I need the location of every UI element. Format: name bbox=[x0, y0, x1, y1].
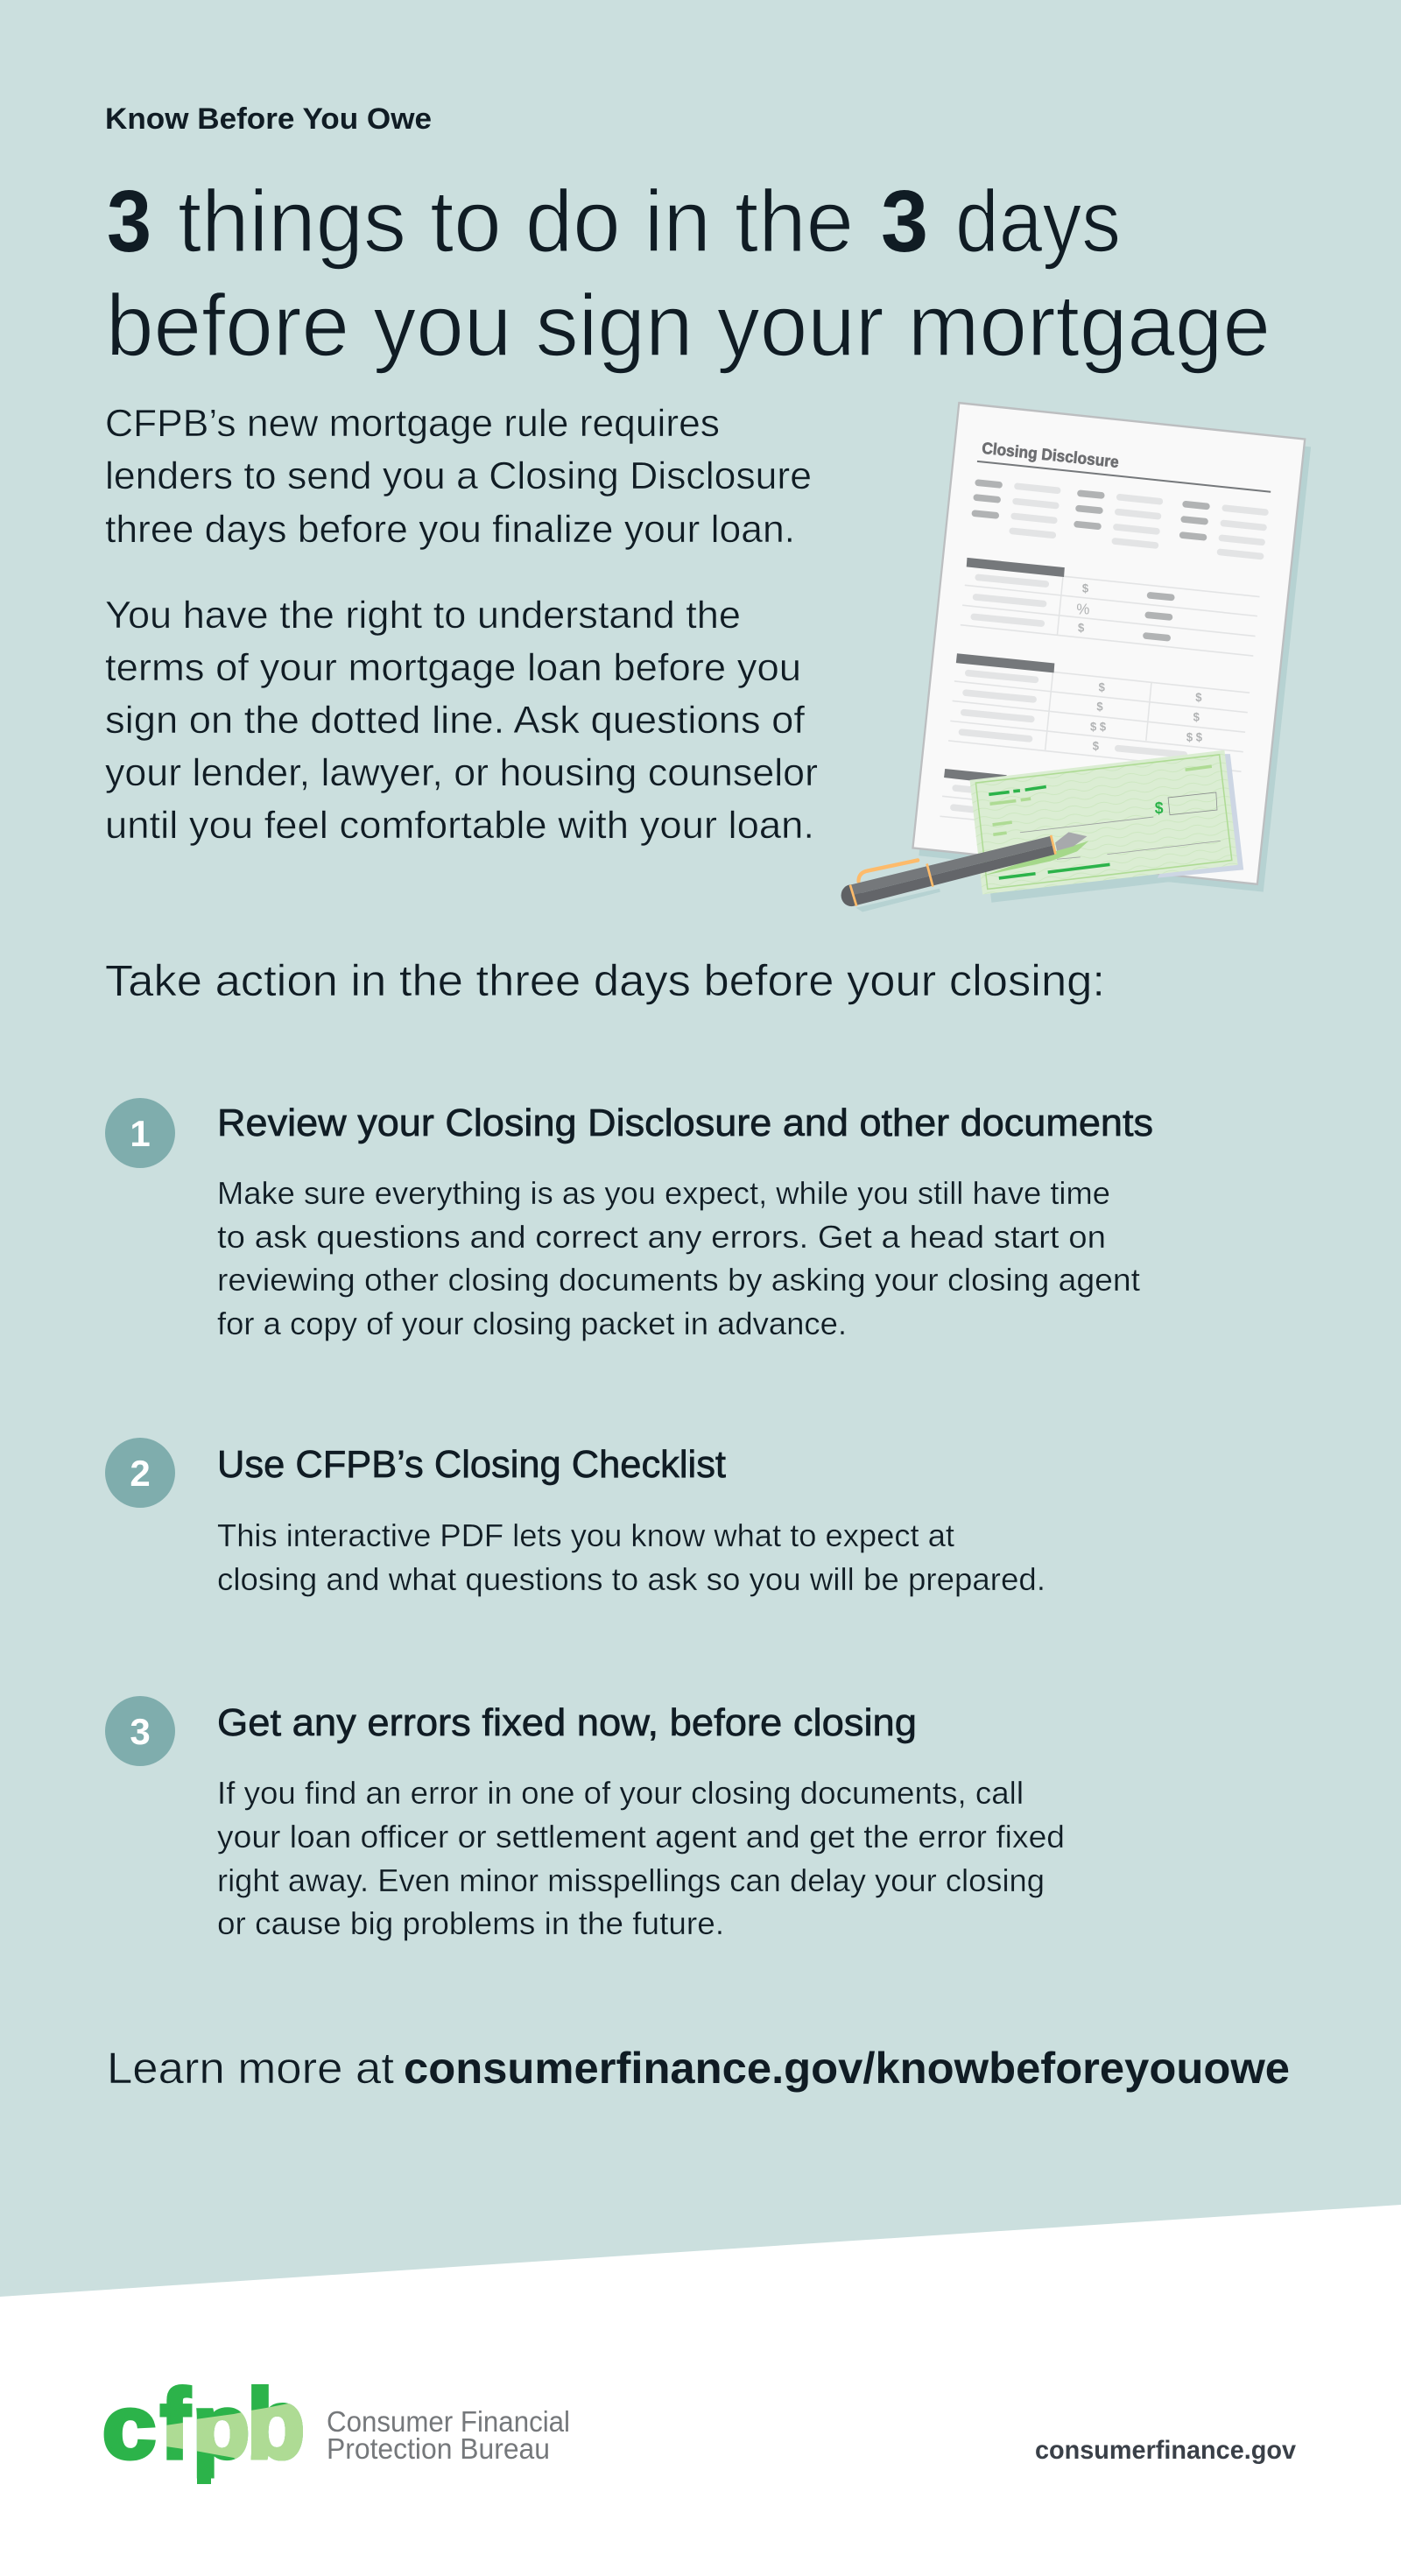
cfpb logo: b bbox=[247, 2369, 305, 2479]
title: 3 bbox=[107, 172, 151, 271]
badge 2 bbox=[105, 1438, 175, 1508]
document page: $ bbox=[1093, 739, 1100, 753]
rights paragraph: You have the right to understand the bbox=[105, 594, 741, 637]
step 2 heading: Use CFPB’s Closing Checklist bbox=[217, 1443, 726, 1486]
website: consumerfinance.gov bbox=[1035, 2436, 1296, 2465]
step 1 body: for a copy of your closing packet in advance. bbox=[217, 1306, 847, 1341]
check bbox=[970, 750, 1243, 894]
logo wordmark: Consumer Financial bbox=[327, 2405, 570, 2438]
illustration: closing disclosure, check and pen bbox=[841, 403, 1311, 912]
title: 3 bbox=[881, 172, 928, 271]
document page: $ $ bbox=[1090, 720, 1107, 734]
rights paragraph bbox=[105, 594, 818, 847]
learn more link: consumerfinance.gov/knowbeforeyouowe bbox=[404, 2044, 1290, 2093]
pen bbox=[841, 832, 1088, 912]
learn more link: Learn more at bbox=[107, 2044, 394, 2093]
document page: % bbox=[1076, 600, 1089, 618]
cfpb logo bbox=[102, 2369, 570, 2484]
intro paragraph: three days before you finalize your loan. bbox=[105, 508, 795, 551]
intro paragraph: CFPB’s new mortgage rule requires bbox=[105, 402, 720, 445]
logo wordmark bbox=[327, 2405, 570, 2465]
step 3 body: your loan officer or settlement agent and get the error fixed bbox=[217, 1819, 1065, 1855]
intro paragraph: lenders to send you a Closing Disclosure bbox=[105, 454, 812, 497]
logo wordmark: Protection Bureau bbox=[327, 2432, 550, 2465]
cfpb logo: c bbox=[102, 2377, 156, 2477]
document page: Closing Disclosure bbox=[982, 439, 1120, 471]
title: before you sign your mortgage bbox=[106, 277, 1271, 375]
step 1 heading: Review your Closing Disclosure and other documents bbox=[217, 1101, 1153, 1144]
step 1 body: to ask questions and correct any errors. Get a head start on bbox=[217, 1219, 1106, 1255]
step 1 body: Make sure everything is as you expect, while you still have time bbox=[217, 1175, 1110, 1211]
document page: $ bbox=[1096, 700, 1103, 714]
step 2 body bbox=[217, 1517, 1045, 1597]
title: days bbox=[955, 172, 1121, 271]
eyebrow: Know Before You Owe bbox=[105, 102, 432, 136]
document page bbox=[912, 403, 1305, 884]
document page: $ bbox=[1195, 691, 1202, 704]
title: things to do in the bbox=[178, 172, 854, 271]
rights paragraph: sign on the dotted line. Ask questions of bbox=[105, 699, 806, 742]
rights paragraph: terms of your mortgage loan before you bbox=[105, 646, 801, 689]
intro paragraph bbox=[105, 402, 812, 551]
step 1 body bbox=[217, 1175, 1140, 1341]
step 3 body: If you find an error in one of your closing documents, call bbox=[217, 1775, 1024, 1811]
badge 3: 3 bbox=[130, 1711, 151, 1752]
cfpb logo: f bbox=[160, 2369, 191, 2479]
check shadow bbox=[978, 758, 1246, 903]
document page: $ bbox=[1078, 621, 1085, 635]
document shadow bbox=[919, 411, 1311, 892]
document page: $ bbox=[1082, 581, 1089, 595]
step 2 body: closing and what questions to ask so you will be prepared. bbox=[217, 1561, 1045, 1597]
badge 1 bbox=[105, 1098, 175, 1168]
step 2 bbox=[105, 1438, 1045, 1597]
rights paragraph: your lender, lawyer, or housing counselor bbox=[105, 751, 818, 794]
step 2 body: This interactive PDF lets you know what to expect at bbox=[217, 1517, 954, 1553]
badge 3 bbox=[105, 1696, 175, 1766]
step 3 heading: Get any errors fixed now, before closing bbox=[217, 1701, 917, 1744]
badge 2: 2 bbox=[130, 1453, 151, 1494]
title bbox=[106, 172, 1271, 375]
badge 1: 1 bbox=[130, 1113, 151, 1154]
check: $ bbox=[1155, 799, 1164, 817]
step 3 body: right away. Even minor misspellings can delay your closing bbox=[217, 1862, 1045, 1898]
cfpb logo: p bbox=[193, 2377, 250, 2477]
document page: $ bbox=[1193, 710, 1200, 723]
step 1 body: reviewing other closing documents by asking your closing agent bbox=[217, 1262, 1140, 1298]
step 3 body bbox=[217, 1775, 1065, 1941]
document page: $ bbox=[1099, 680, 1105, 694]
action heading: Take action in the three days before your closing: bbox=[105, 956, 1105, 1005]
document page: $ $ bbox=[1186, 730, 1203, 743]
step 1 bbox=[105, 1098, 1153, 1341]
rights paragraph: until you feel comfortable with your loan. bbox=[105, 804, 814, 847]
step 3 body: or cause big problems in the future. bbox=[217, 1905, 724, 1941]
step 3 bbox=[105, 1696, 1065, 1941]
